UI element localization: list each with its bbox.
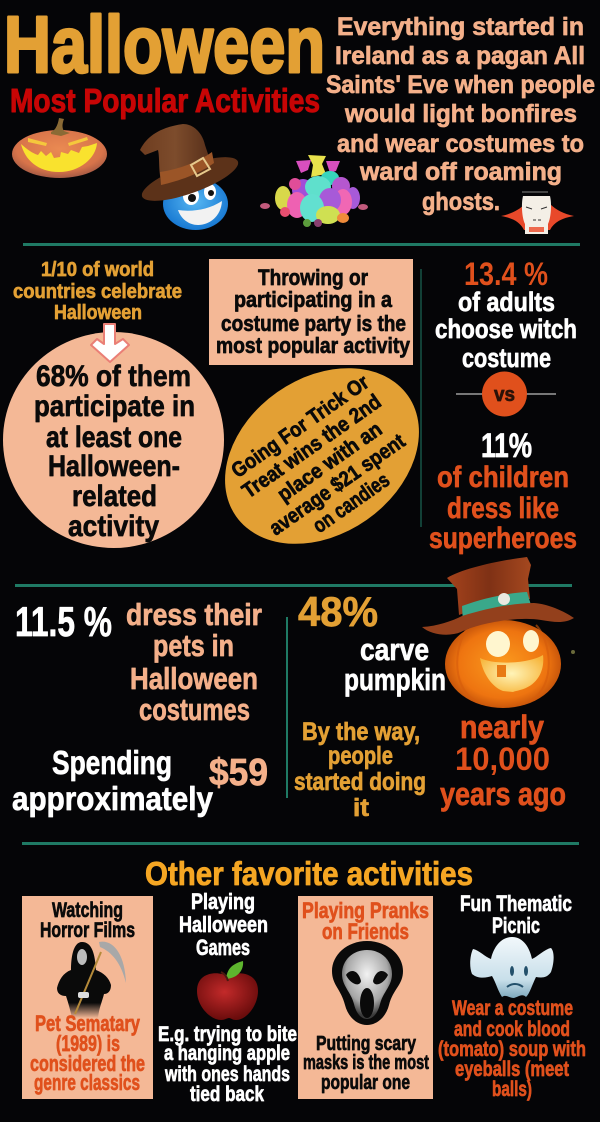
- circle: 68% participate: participate in: [34, 390, 195, 423]
- stat: 11% children superheroes: 11%: [481, 427, 532, 465]
- panel: costume party: [209, 259, 413, 365]
- icon: scream mask: [332, 941, 403, 1025]
- panel: watching horror films: Horror Films: [40, 919, 135, 942]
- panel: playing pranks on friends: [298, 896, 433, 1099]
- arrow: pointing down: [91, 324, 129, 362]
- text block: origin of Halloween: Ireland as a pagan All: [335, 42, 585, 70]
- panel: playing pranks on friends: popular one: [321, 1072, 410, 1094]
- text block: spending approximately: [12, 744, 214, 817]
- text block: 1/10 of world countries: Halloween: [54, 302, 142, 324]
- text block: spending approximately: approximately: [12, 780, 214, 817]
- stat: $59: $59: [209, 752, 268, 794]
- panel: fun thematic picnic: eyeballs (meet: [455, 1058, 569, 1081]
- circle: 68% participate: 68% of them: [36, 360, 191, 393]
- panel: playing halloween games: with ones hands: [164, 1063, 290, 1086]
- text block: dress their pets: dress their: [126, 597, 262, 632]
- text block: by the way: By the way,: [302, 718, 420, 746]
- circle: 68% participate: activity: [68, 510, 159, 543]
- ellipse: trick or treat: Going For Trick Or: [227, 371, 373, 483]
- text block: origin of Halloween: [326, 13, 595, 216]
- ellipse: trick or treat: place with an: [273, 418, 386, 506]
- text block: origin of Halloween: would light bonfires: [344, 100, 577, 128]
- circle: 68% participate: at least one: [46, 421, 182, 454]
- panel: playing pranks on friends: on Friends: [322, 919, 409, 944]
- versus badge: [456, 372, 556, 416]
- text block: nearly 10,000 years ago: years ago: [440, 776, 566, 812]
- panel: watching horror films: (1989) is: [56, 1031, 120, 1056]
- title: Halloween: [4, 0, 325, 89]
- panel: watching horror films: considered the: [30, 1051, 145, 1076]
- panel: playing halloween games: Games: [196, 935, 250, 960]
- panel: fun thematic picnic: Picnic: [492, 913, 540, 938]
- versus badge: vs: [494, 384, 515, 406]
- text block: nearly 10,000 years ago: [440, 709, 566, 812]
- text block: origin of Halloween: and wear costumes to: [337, 130, 584, 158]
- panel: costume party: participating in a: [234, 287, 393, 312]
- stat: 11.5%: 11.5 %: [15, 598, 112, 645]
- icon: vampire: [501, 191, 574, 234]
- panel: playing halloween games: Halloween: [179, 912, 268, 937]
- stat: 11% children superheroes: of children: [437, 461, 569, 494]
- ellipse: trick or treat: on candies: [309, 469, 394, 538]
- text block: 1/10 of world countries: 1/10 of world: [41, 259, 154, 281]
- stat: 48%: 48%: [298, 588, 378, 635]
- panel: playing halloween games: [158, 889, 297, 1106]
- heading: other favorite activities: Other favorite activities: [145, 855, 473, 892]
- icon: jack-o-lantern with top hat: [422, 557, 574, 708]
- panel: playing halloween games: E.g. trying to bite: [158, 1023, 297, 1046]
- icon: blue smiley in witch hat: [137, 124, 243, 230]
- text block: carve pumpkin: pumpkin: [344, 662, 446, 697]
- panel: costume party: Throwing or: [258, 265, 368, 290]
- subtitle: Most Popular Activities: [10, 82, 320, 119]
- text block: origin of Halloween: ward off roaming: [359, 158, 562, 186]
- panel: playing pranks on friends: masks is the most: [303, 1052, 429, 1074]
- stat: 11% children superheroes: [429, 427, 577, 555]
- stat: 13.4% adults witch costume: 13.4 %: [464, 256, 548, 292]
- text block: by the way: started doing: [294, 768, 426, 796]
- panel: playing pranks on friends: Playing Pranks: [302, 898, 429, 923]
- icon: apple: [197, 961, 258, 1020]
- stat: 13.4% adults witch costume: [435, 256, 577, 373]
- stat: 11% children superheroes: dress like: [447, 492, 559, 525]
- icon: grim reaper: [57, 942, 126, 1018]
- stat: 13.4% adults witch costume: of adults: [458, 287, 555, 317]
- icon: candy pile: [260, 155, 368, 227]
- panel: watching horror films: Pet Sematary: [35, 1011, 141, 1036]
- icon: carved pumpkin: [12, 118, 107, 178]
- panel: fun thematic picnic: Fun Thematic: [460, 891, 572, 916]
- panel: watching horror films: Watching: [52, 899, 123, 922]
- text block: 1/10 of world countries: [13, 259, 182, 324]
- text block: dress their pets: Halloween: [130, 661, 258, 696]
- panel: watching horror films: [22, 896, 153, 1099]
- ellipse: trick or treat: Treat wins the 2nd: [238, 390, 386, 503]
- text block: 1/10 of world countries: countries celebrate: [13, 281, 182, 303]
- panel: playing halloween games: tied back: [190, 1083, 264, 1106]
- text block: carve pumpkin: [344, 632, 446, 697]
- text block: by the way: people: [328, 742, 393, 770]
- text block: nearly 10,000 years ago: nearly: [460, 709, 544, 745]
- panel: costume party: costume party is the: [221, 311, 406, 336]
- text block: carve pumpkin: carve: [360, 632, 429, 667]
- circle: 68% participate: Halloween-: [48, 450, 180, 483]
- text block: dress their pets: pets in: [153, 628, 234, 663]
- stat: 13.4% adults witch costume: costume: [462, 343, 551, 373]
- text block: by the way: it: [353, 794, 370, 822]
- text block: nearly 10,000 years ago: 10,000: [455, 741, 550, 777]
- text block: origin of Halloween: ghosts.: [422, 188, 500, 216]
- panel: fun thematic picnic: balls): [492, 1078, 532, 1101]
- panel: playing halloween games: a hanging apple: [164, 1042, 290, 1065]
- text block: by the way: [294, 718, 426, 822]
- text block: origin of Halloween: Everything started in: [337, 13, 584, 41]
- circle: 68% participate: related: [72, 480, 157, 513]
- panel: fun thematic picnic: [438, 891, 586, 1101]
- panel: playing pranks on friends: Putting scary: [316, 1033, 417, 1055]
- ellipse: trick or treat: average $21 spent: [265, 430, 409, 540]
- text block: spending approximately: Spending: [52, 744, 172, 781]
- icon: ghost: [470, 937, 554, 998]
- circle: 68% participate: [3, 332, 224, 548]
- decorative dot: [571, 650, 575, 654]
- panel: costume party: most popular activity: [216, 333, 411, 358]
- text block: dress their pets: costumes: [139, 692, 250, 727]
- ellipse: trick or treat: [191, 332, 453, 580]
- panel: playing halloween games: Playing: [191, 889, 255, 914]
- text block: dress their pets: [126, 597, 262, 727]
- panel: watching horror films: genre classics: [34, 1070, 140, 1095]
